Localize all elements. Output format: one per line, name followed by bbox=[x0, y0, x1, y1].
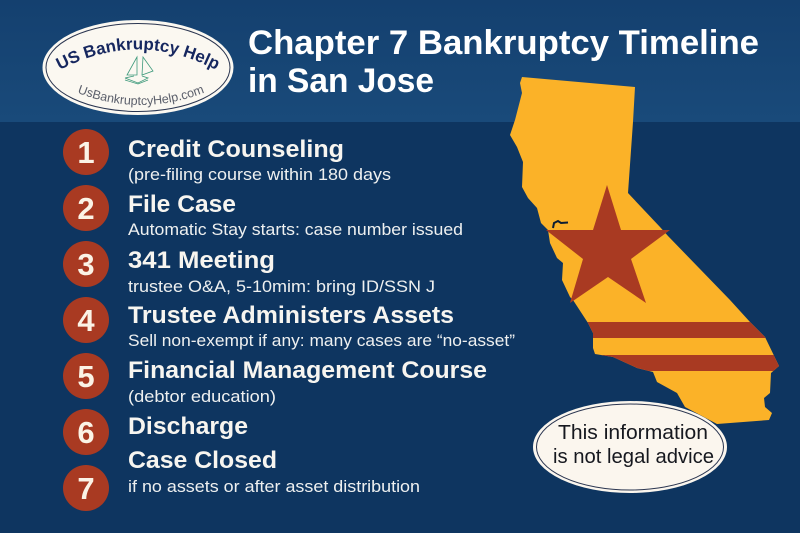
step 7: 7 bbox=[77, 471, 95, 506]
logo badge bbox=[42, 20, 234, 115]
step 3: trustee O&A, 5-10mim: bring ID/SSN J bbox=[128, 277, 435, 296]
header band bbox=[0, 0, 800, 122]
step 4: Trustee Administers Assets bbox=[128, 302, 454, 329]
step 1: (pre-filing course within 180 days bbox=[128, 165, 391, 184]
step 4: Sell non-exempt if any: many cases are “no-asset” bbox=[128, 331, 515, 350]
step 3: 341 Meeting bbox=[128, 247, 275, 274]
title bbox=[248, 24, 759, 100]
step 5 bbox=[63, 353, 487, 406]
step 3: 3 bbox=[77, 247, 95, 282]
step 2: 2 bbox=[77, 191, 95, 226]
step 4 bbox=[63, 297, 515, 350]
step 4: 4 bbox=[77, 303, 95, 338]
step 2: Automatic Stay starts: case number issued bbox=[128, 220, 463, 239]
map: California bbox=[510, 77, 790, 424]
logo name: US Bankruptcy Help bbox=[55, 38, 218, 70]
step 6: 6 bbox=[77, 415, 95, 450]
step 6 bbox=[63, 409, 248, 455]
step 1: 1 bbox=[77, 135, 95, 170]
step 1 bbox=[63, 129, 391, 184]
step 7 bbox=[63, 447, 420, 511]
step 2 bbox=[63, 185, 463, 239]
step 5: (debtor education) bbox=[128, 387, 276, 406]
step 7: Case Closed bbox=[128, 447, 277, 474]
step 6: Discharge bbox=[128, 413, 248, 440]
callout: disclaimer: is not legal advice bbox=[553, 446, 714, 468]
icon: sailboat bbox=[125, 57, 153, 84]
map star bbox=[546, 185, 670, 303]
callout: disclaimer: This information bbox=[558, 422, 708, 444]
step 3 bbox=[63, 241, 435, 296]
step 2: File Case bbox=[128, 191, 236, 218]
step 5: 5 bbox=[77, 359, 95, 394]
step 5: Financial Management Course bbox=[128, 357, 487, 384]
logo url: UsBankruptcyHelp.com bbox=[78, 85, 204, 108]
callout: disclaimer bbox=[533, 401, 727, 493]
map stripes bbox=[580, 322, 790, 371]
step 7: if no assets or after asset distribution bbox=[128, 477, 420, 496]
map bay bbox=[553, 221, 568, 228]
title: Chapter 7 Bankruptcy Timeline bbox=[248, 24, 759, 62]
title: in San Jose bbox=[248, 62, 434, 100]
step 1: Credit Counseling bbox=[128, 136, 344, 163]
